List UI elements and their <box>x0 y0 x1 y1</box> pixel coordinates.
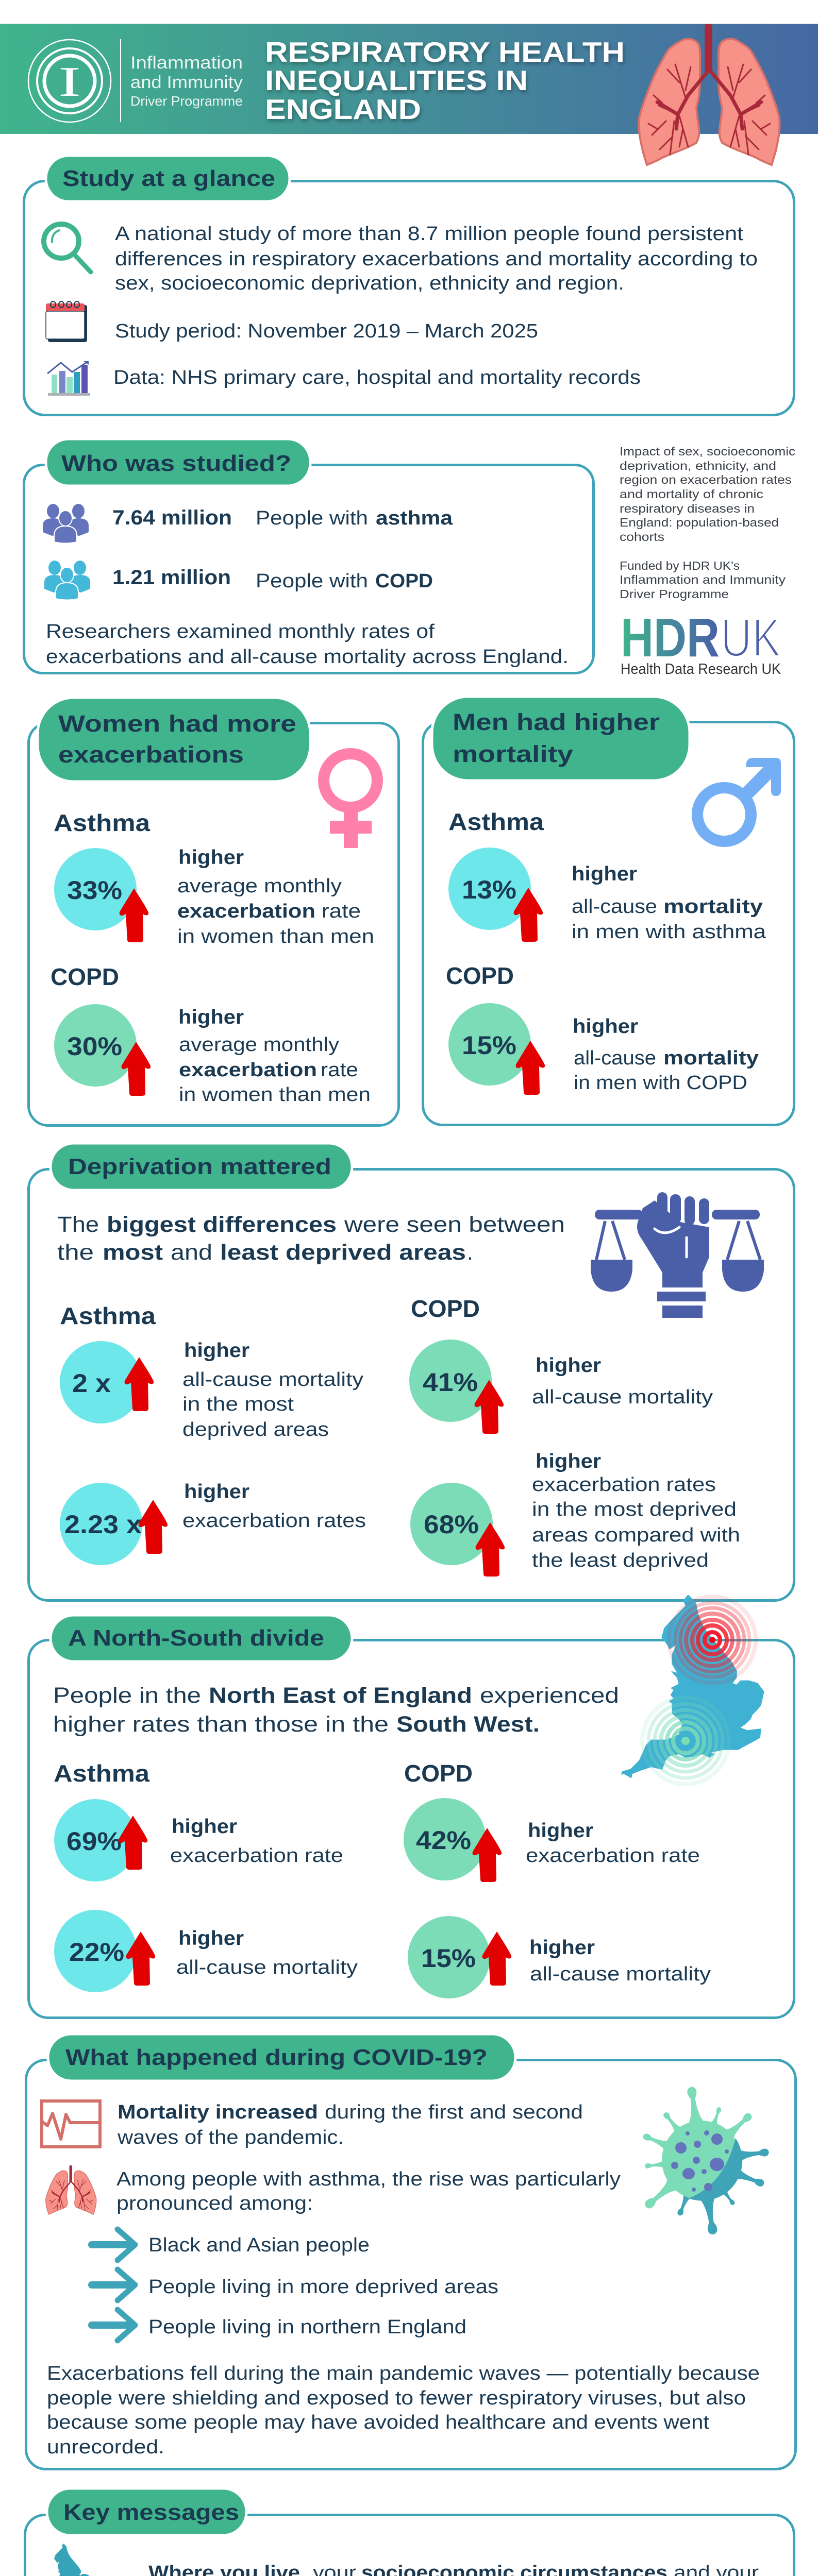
stat: 30% COPD women: higher <box>178 1006 244 1028</box>
text: mortality increased: during the first and second <box>325 2102 583 2123</box>
heading pill <box>48 2034 515 2081</box>
arrow <box>92 2229 135 2260</box>
stat: 68% COPD exacerbations <box>410 1450 740 1577</box>
logo: HDR UK <box>621 607 781 677</box>
title <box>265 36 625 125</box>
intro text: South West. <box>396 1712 540 1737</box>
stat: 22% asthma mortality: 22% <box>69 1938 124 1967</box>
stat: 69% asthma exacerbation: exacerbation rate <box>170 1845 343 1867</box>
intro text: the <box>57 1240 94 1265</box>
text: funding: Funded by HDR UK's <box>620 559 740 572</box>
stat: 2.23x asthma exacerbations <box>60 1481 366 1565</box>
stat: 22% asthma mortality <box>54 1910 358 1992</box>
text: exacerbations fell <box>47 2363 760 2458</box>
logo: HDR UK: UK <box>721 607 781 668</box>
stat: 2x asthma mortality: 2 x <box>72 1369 111 1398</box>
stat: 2x asthma mortality: in the most <box>182 1394 294 1415</box>
text: mortality increased: waves of the pandemic. <box>117 2127 344 2148</box>
intro text: experienced <box>480 1683 619 1708</box>
heading pill: What happened during COVID-19? <box>65 2045 488 2070</box>
label: COPD: COPD <box>404 1760 473 1787</box>
stat: 22% asthma mortality: higher <box>178 1927 244 1950</box>
text: paper title <box>620 445 795 544</box>
label: COPD: COPD <box>446 962 514 989</box>
text: paper title: respiratory diseases in <box>620 502 755 515</box>
text: methods: Researchers examined monthly rates of <box>46 621 435 642</box>
icon: female symbol <box>324 754 377 848</box>
stat: asthma population: asthma <box>376 507 453 529</box>
text: study summary <box>115 223 758 294</box>
text: where you live <box>148 2562 759 2576</box>
text: paper title: and mortality of chronic <box>620 487 763 501</box>
intro text: biggest differences <box>107 1212 337 1237</box>
heading pill: exacerbations <box>58 741 244 768</box>
text: exacerbations fell: unrecorded. <box>47 2436 164 2458</box>
arrow <box>92 2310 135 2341</box>
heading pill <box>51 1143 352 1190</box>
stat: 33% asthma women: average monthly <box>177 875 342 897</box>
stat: 30% COPD women <box>54 1004 371 1106</box>
stat: 2.23x asthma exacerbations: exacerbation rates <box>182 1510 366 1532</box>
stat: 42% COPD exacerbation: 42% <box>416 1826 471 1855</box>
label: COPD: COPD <box>51 963 119 990</box>
text: data sources: Data: NHS primary care, hospital and mortality records <box>113 367 641 388</box>
section: study at a glance <box>24 156 794 415</box>
stat: 15% COPD men: 15% <box>462 1031 516 1060</box>
text: paper title: cohorts <box>620 530 664 544</box>
hotspot: South West <box>642 1698 729 1784</box>
hotspot: North East <box>669 1597 756 1683</box>
text: mortality increased: Mortality increased <box>118 2102 318 2123</box>
map of England with hotspots <box>621 1595 764 1784</box>
stat: 2x asthma mortality: all-cause mortality <box>182 1369 363 1391</box>
icon: lungs small <box>46 2165 96 2214</box>
stat: asthma population <box>112 506 453 529</box>
stat: 15% COPD men: in men with COPD <box>574 1072 747 1094</box>
text: paper title: Impact of sex, socioeconomic <box>620 445 795 458</box>
stat: 42% COPD exacerbation: exacerbation rate <box>526 1845 700 1867</box>
intro text: were seen between <box>344 1212 565 1237</box>
logo: Inflammation and Immunity: Driver Programme <box>130 93 243 109</box>
stat: 2x asthma mortality: higher <box>184 1340 249 1362</box>
icon: heart monitor <box>42 2101 100 2147</box>
icon: lungs <box>639 24 779 165</box>
heading pill: Key messages <box>63 2500 239 2525</box>
text: among people with asthma: pronounced among: <box>116 2193 313 2214</box>
heading pill: Deprivation mattered <box>68 1154 331 1179</box>
stat: 13% asthma men: 13% <box>462 875 516 904</box>
stat: 13% asthma men <box>448 848 766 943</box>
stat: 69% asthma exacerbation: 69% <box>66 1827 122 1856</box>
stat: 22% asthma mortality: all-cause mortality <box>176 1957 358 1978</box>
stat: 68% COPD exacerbations: the least deprived <box>532 1550 709 1571</box>
intro text: The <box>57 1212 99 1237</box>
stat: 41% COPD mortality: all-cause mortality <box>532 1386 713 1408</box>
stat: 13% asthma men: in men with asthma <box>572 921 766 943</box>
text: among people with asthma <box>116 2168 621 2214</box>
stat: 15% COPD men: mortality <box>663 1047 759 1069</box>
panel border <box>24 181 794 415</box>
icon: fist holding scales <box>591 1192 764 1318</box>
stat: 41% COPD mortality <box>409 1340 713 1434</box>
text: exacerbations fell: Exacerbations fell during the main pandemic waves — potentially because <box>47 2363 760 2384</box>
stat: 13% asthma men: higher <box>572 863 637 885</box>
stat: 30% COPD women: exacerbation <box>179 1059 317 1081</box>
logo: Inflammation and Immunity <box>28 39 243 122</box>
stat: 15% COPD mortality: higher <box>529 1937 595 1959</box>
heading pill: Women had more <box>58 710 296 737</box>
section: key messages <box>25 2488 794 2576</box>
stat: 13% asthma men: mortality <box>663 896 763 918</box>
intro text: People in the <box>53 1683 201 1708</box>
stat: 33% asthma women: higher <box>178 846 244 869</box>
heading pill <box>38 698 310 782</box>
text: exacerbations fell: because some people may have avoided healthcare and events went <box>47 2412 709 2433</box>
section: women had more exacerbations <box>29 698 399 1125</box>
stat: 69% asthma exacerbation <box>54 1799 343 1882</box>
intro text: least deprived areas <box>220 1240 466 1265</box>
heading pill: Men had higher <box>453 709 660 735</box>
stat: 2x asthma mortality: deprived areas <box>182 1419 329 1440</box>
text: study period: Study period: November 2019 – March 2025 <box>115 320 538 342</box>
stat: 68% COPD exacerbations: 68% <box>424 1510 479 1539</box>
stat: 68% COPD exacerbations: higher <box>536 1450 601 1472</box>
stat: 30% COPD women: rate <box>321 1059 358 1081</box>
text: funding: Driver Programme <box>620 587 729 601</box>
heading pill: Study at a glance <box>62 166 275 191</box>
stat: 15% COPD mortality: 15% <box>421 1944 476 1973</box>
stat: 68% COPD exacerbations: exacerbation rates <box>532 1474 716 1496</box>
text: paper title: region on exacerbation rates <box>620 473 792 486</box>
icon: virus <box>640 2086 770 2236</box>
heading pill: mortality <box>453 741 573 767</box>
label: asthma: Asthma <box>54 1760 149 1787</box>
label: asthma: Asthma <box>448 808 544 835</box>
icon: bar chart <box>47 361 90 396</box>
heading pill <box>51 1615 352 1662</box>
list: affected groups: Black and Asian people <box>148 2234 370 2256</box>
label: COPD: COPD <box>411 1295 480 1322</box>
stat: 13% asthma men: all-cause <box>572 896 657 918</box>
text: among people with asthma: Among people with asthma, the rise was particularly <box>116 2168 621 2190</box>
text: funding <box>620 559 786 601</box>
stat: asthma population: 7.64 million <box>112 506 232 529</box>
stat: 42% COPD exacerbation <box>404 1798 700 1882</box>
text: methods <box>46 621 569 668</box>
intro text: and <box>171 1240 212 1265</box>
icon: magnifier <box>44 224 91 272</box>
list: affected groups: People living in northern England <box>148 2316 466 2338</box>
text: study summary: differences in respiratory exacerbations and mortality according to <box>115 248 758 270</box>
header banner <box>0 24 818 134</box>
panel border <box>24 465 594 673</box>
heading pill <box>46 439 310 486</box>
stat: 42% COPD exacerbation: higher <box>528 1820 593 1842</box>
label: asthma: Asthma <box>54 809 150 836</box>
stat: 33% asthma women: exacerbation <box>177 901 315 922</box>
intro text <box>57 1212 565 1265</box>
stat: 33% asthma women <box>54 846 374 947</box>
heading pill <box>47 2488 246 2535</box>
heading pill: A North-South divide <box>68 1625 324 1651</box>
list: affected groups: People living in more deprived areas <box>148 2276 498 2298</box>
heading pill <box>46 156 290 201</box>
text: methods: exacerbations and all-cause mortality across England. <box>46 646 569 668</box>
stat: 2.23x asthma exacerbations: 2.23 x <box>64 1510 142 1539</box>
intro text: higher rates than those in the <box>53 1712 389 1737</box>
panel border <box>29 1170 794 1600</box>
section: men had higher mortality <box>423 697 794 1125</box>
stat: COPD population: People with <box>256 570 368 592</box>
stat: 15% COPD men: all-cause <box>574 1047 656 1069</box>
stat: 30% COPD women: average monthly <box>179 1034 339 1056</box>
icon: COPD people <box>44 561 90 600</box>
text: study summary: A national study of more than 8.7 million people found persistent <box>115 223 743 245</box>
text: study summary: sex, socioeconomic deprivation, ethnicity and region. <box>115 273 624 294</box>
logo: HDR UK: Health Data Research UK <box>621 661 781 677</box>
stat: 15% COPD mortality <box>408 1916 711 1998</box>
stat: 33% asthma women: rate <box>322 901 361 922</box>
stat: 41% COPD mortality: 41% <box>423 1368 478 1397</box>
logo: HDR UK: HDR <box>621 607 720 668</box>
intro text: . <box>467 1240 473 1265</box>
side column: citation and funder <box>620 445 795 677</box>
heading pill <box>432 697 690 781</box>
section: deprivation mattered <box>29 1143 794 1600</box>
stat: 69% asthma exacerbation: higher <box>172 1816 237 1838</box>
arrow <box>92 2269 135 2300</box>
icon: asthma people <box>43 504 89 543</box>
stat: 33% asthma women: 33% <box>67 876 122 905</box>
text: exacerbations fell: people were shielding and exposed to fewer respiratory viruses, but also <box>47 2387 746 2409</box>
stat: 2.23x asthma exacerbations: higher <box>184 1481 249 1503</box>
icon: small England map <box>40 2544 91 2576</box>
stat: 15% COPD men: higher <box>573 1015 638 1038</box>
logo: Inflammation and Immunity: I <box>58 58 81 105</box>
logo: Inflammation and Immunity: Inflammation <box>130 53 243 73</box>
panel border <box>29 1640 794 2018</box>
panel border <box>423 722 794 1125</box>
panel border <box>29 723 399 1125</box>
list: affected groups <box>92 2229 498 2341</box>
stat: 30% COPD women: 30% <box>67 1032 122 1061</box>
stat: asthma population: People with <box>256 507 368 529</box>
stat: COPD population: COPD <box>375 570 433 592</box>
stat: 33% asthma women: in women than men <box>177 926 374 947</box>
intro text: North East of England <box>209 1683 472 1708</box>
text: paper title: deprivation, ethnicity, and <box>620 459 776 472</box>
text: mortality increased <box>117 2102 583 2148</box>
section: north-south divide <box>29 1595 794 2018</box>
stat: 2x asthma mortality <box>60 1340 363 1440</box>
title: INEQUALITIES IN <box>265 64 528 96</box>
stat: 30% COPD women: in women than men <box>179 1084 371 1106</box>
title: RESPIRATORY HEALTH <box>265 36 625 68</box>
section: who was studied <box>24 439 594 673</box>
stat: COPD population: 1.21 million <box>112 566 231 589</box>
icon: male symbol <box>697 758 781 841</box>
section: COVID-19 <box>26 2034 796 2469</box>
stat: 41% COPD mortality: higher <box>536 1354 601 1377</box>
stat: 68% COPD exacerbations: in the most deprived <box>532 1499 737 1520</box>
text: paper title: England: population-based <box>620 516 779 529</box>
title: ENGLAND <box>265 93 421 125</box>
stat: 68% COPD exacerbations: areas compared with <box>532 1524 740 1546</box>
text: funding: Inflammation and Immunity <box>620 573 786 586</box>
stat: 15% COPD men <box>448 1003 759 1095</box>
icon: calendar <box>46 301 87 342</box>
stat: 15% COPD mortality: all-cause mortality <box>530 1963 711 1985</box>
heading pill: Who was studied? <box>61 451 291 476</box>
stat: COPD population <box>112 566 433 592</box>
logo: Inflammation and Immunity: and Immunity <box>130 73 243 92</box>
panel border <box>25 2515 794 2576</box>
intro text: most <box>103 1240 163 1265</box>
label: asthma: Asthma <box>60 1302 156 1329</box>
intro text <box>53 1683 619 1737</box>
panel border <box>26 2060 796 2469</box>
